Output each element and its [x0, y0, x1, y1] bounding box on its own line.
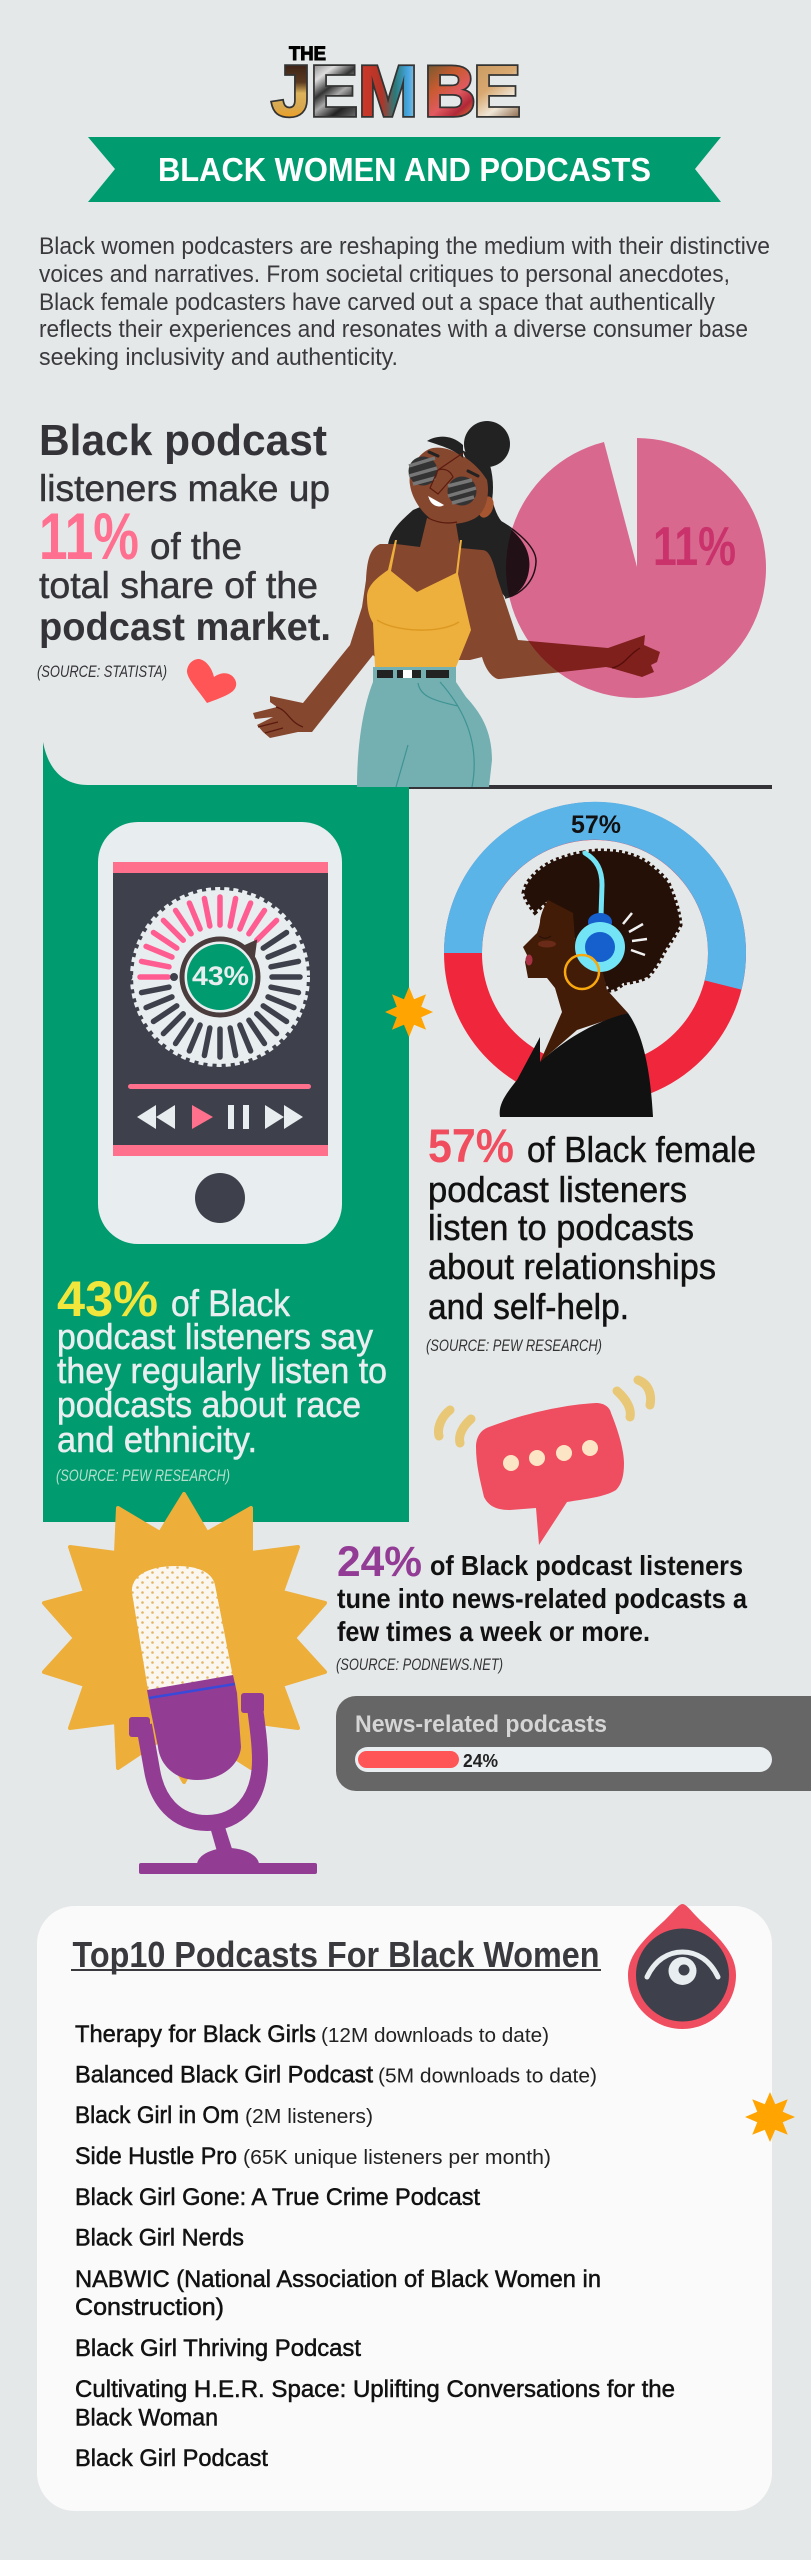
stat text: 11 percent: listeners make up	[39, 468, 330, 509]
stat text: 57 percent: podcast listeners	[428, 1169, 687, 1210]
stat text: 43 percent: 43%	[57, 1271, 158, 1327]
green panel: 43 percent	[43, 742, 409, 1522]
stat text: 11 percent: (SOURCE: STATISTA)	[37, 662, 167, 681]
logo: The Jembe: E	[310, 52, 358, 132]
pie chart: 11 percent	[506, 438, 766, 698]
stat text: 57 percent	[426, 1119, 756, 1355]
neck and torso skin	[253, 518, 660, 738]
chin line	[428, 518, 457, 523]
smile	[429, 497, 443, 506]
stat text: 57 percent: and self-help.	[428, 1286, 629, 1327]
sunburst	[44, 1494, 325, 1782]
lips	[526, 954, 532, 966]
cheek	[538, 940, 556, 948]
icon: eye drop	[628, 1904, 736, 2029]
logo: The Jembe: J	[271, 52, 311, 132]
stat text: 24 percent	[336, 1538, 747, 1674]
mic stem	[210, 1827, 234, 1855]
rewind button	[137, 1105, 175, 1129]
right clip	[241, 1693, 264, 1713]
donut chart: 57 percent: 57%	[571, 811, 621, 839]
title banner	[88, 137, 721, 202]
phone body	[98, 822, 342, 1244]
screen bottom stripe	[113, 1145, 328, 1156]
podcast list: Black Girl Gone: A True Crime Podcast	[75, 2184, 480, 2211]
sound lines	[623, 913, 647, 955]
home button	[195, 1173, 245, 1223]
bar chart: news-related podcasts: 24%	[463, 1751, 498, 1771]
stat text: 43 percent: they regularly listen to	[57, 1350, 387, 1391]
podcast list: Therapy for Black Girls	[75, 2021, 316, 2048]
podcast list: Black Girl Thriving Podcast	[75, 2335, 361, 2362]
stat text: 43 percent: (SOURCE: PEW RESEARCH)	[56, 1466, 230, 1485]
podcast list: (5M downloads to date)	[378, 2066, 597, 2088]
logo: The Jembe: E	[473, 52, 521, 132]
stat text: 11 percent: total share of the	[39, 565, 318, 606]
donut chart: 57 percent	[463, 811, 727, 1085]
hand lines	[258, 648, 640, 733]
logo: The Jembe: THE	[289, 44, 326, 65]
podcast list	[75, 2021, 675, 2472]
mic stripe	[149, 1684, 235, 1698]
ear	[476, 494, 496, 520]
stat text: 43 percent	[56, 1271, 387, 1485]
mic base	[197, 1848, 259, 1864]
podcast list: (12M downloads to date)	[321, 2025, 549, 2047]
bar chart: news-related podcasts	[336, 1696, 811, 1791]
bar chart: news-related podcasts: News-related podcasts	[355, 1711, 607, 1738]
dial	[124, 890, 307, 1064]
jeans seams	[396, 682, 474, 787]
logo: The Jembe: M	[358, 52, 418, 132]
stat text: 24 percent: tune into news-related podcasts a	[337, 1583, 747, 1614]
sunglasses	[408, 453, 476, 506]
stat text: 43 percent: and ethnicity.	[57, 1419, 257, 1460]
afro hair	[524, 851, 680, 990]
stat text: 11 percent: 11%	[39, 499, 139, 573]
hair bun	[464, 421, 510, 467]
black shirt	[500, 1013, 653, 1117]
pause button	[228, 1105, 249, 1129]
podcast list: (65K unique listeners per month)	[243, 2147, 551, 2169]
illustration: woman holding pie chart	[253, 421, 660, 787]
stat text: 24 percent: few times a week or more.	[337, 1616, 650, 1647]
ear cup	[575, 922, 625, 972]
podcast list: Black Girl Podcast	[75, 2445, 268, 2472]
podcast list: Construction)	[75, 2294, 224, 2321]
phone illustration	[98, 822, 342, 1244]
belt	[373, 667, 456, 682]
mic head	[132, 1566, 233, 1690]
stat text: 57 percent: (SOURCE: PEW RESEARCH)	[426, 1336, 602, 1355]
stat text: 24 percent: of Black podcast listeners	[430, 1550, 743, 1581]
podcast list: Black Girl Nerds	[75, 2225, 244, 2252]
podcast list: Side Hustle Pro	[75, 2143, 237, 2170]
icon: orange star	[385, 987, 433, 1037]
stat text: 11 percent: of the	[150, 526, 242, 567]
stat text: 24 percent: (SOURCE: PODNEWS.NET)	[336, 1655, 503, 1674]
podcast list: Black Woman	[75, 2404, 218, 2432]
stat text: 11 percent	[37, 416, 331, 681]
ear cup top	[588, 913, 612, 931]
mic clips	[129, 1717, 150, 1737]
stat text: 57 percent: 57%	[428, 1119, 514, 1172]
eyebrows	[429, 452, 478, 476]
hair right side	[462, 450, 493, 510]
stat text: 24 percent: 24%	[337, 1538, 422, 1586]
face	[410, 448, 488, 524]
logo: The Jembe: B	[424, 52, 476, 132]
screen top stripe	[113, 862, 328, 873]
closed eye	[539, 936, 551, 938]
illustration: woman with headphones	[500, 851, 680, 1117]
title banner: BLACK WOMEN AND PODCASTS	[158, 151, 651, 188]
stat text: 57 percent: of Black female	[527, 1129, 756, 1170]
intro paragraph: Black women podcasters are reshaping the medium with their distinctive	[39, 233, 770, 260]
intro paragraph: Black female podcasters have carved out a space that authentically	[39, 289, 715, 316]
jeans	[357, 682, 492, 787]
podcast list: Black Girl in Om	[75, 2102, 239, 2129]
intro paragraph	[39, 233, 770, 371]
progress bar	[128, 1084, 311, 1089]
screen	[113, 873, 328, 1145]
forward button	[265, 1105, 303, 1129]
stat text: 43 percent: of Black	[171, 1283, 290, 1324]
ear cup centre	[585, 932, 615, 962]
stat text: 43 percent: podcast listeners say	[57, 1316, 373, 1357]
intro paragraph: seeking inclusivity and authenticity.	[39, 344, 398, 371]
hair fringe	[427, 437, 463, 458]
stat text: 57 percent: listen to podcasts	[428, 1207, 694, 1248]
podcast list: NABWIC (National Association of Black Women in	[75, 2266, 601, 2293]
intro paragraph: voices and narratives. From societal critiques to personal anecdotes,	[39, 261, 730, 288]
intro paragraph: reflects their experiences and resonates with a diverse consumer base	[39, 316, 748, 343]
podcast list: Balanced Black Girl Podcast	[75, 2062, 373, 2088]
mic foot	[139, 1863, 317, 1874]
skin	[523, 900, 628, 1062]
top seam	[377, 620, 459, 630]
yellow top	[367, 540, 471, 667]
play button	[192, 1105, 213, 1129]
stat text: 11 percent: podcast market.	[39, 606, 331, 649]
icon: heart	[187, 659, 236, 703]
podcast list: (2M listeners)	[245, 2106, 373, 2128]
panel: top 10 podcasts	[37, 1904, 772, 2511]
earring	[565, 955, 599, 989]
stat text: 43 percent: podcasts about race	[57, 1384, 361, 1425]
stat text: 57 percent: about relationships	[428, 1246, 716, 1287]
icon: speech bubble	[438, 1380, 651, 1545]
icon: orange star on card edge	[745, 2092, 795, 2142]
mic holder	[144, 1700, 260, 1823]
podcast list: Cultivating H.E.R. Space: Uplifting Conversations for the	[75, 2376, 675, 2403]
hair back	[388, 478, 529, 597]
black divider line	[409, 785, 772, 789]
logo: The Jembe	[271, 44, 521, 132]
mic body	[147, 1675, 241, 1780]
illustration: microphone on sunburst	[44, 1494, 325, 1874]
dial: 43%	[192, 961, 249, 991]
stat text: 11 percent: Black podcast	[39, 416, 327, 465]
pie label: 11%	[653, 515, 736, 577]
headband	[585, 853, 602, 916]
list heading: Top10 Podcasts For Black Women	[72, 1934, 600, 1975]
hair strand	[488, 515, 536, 598]
